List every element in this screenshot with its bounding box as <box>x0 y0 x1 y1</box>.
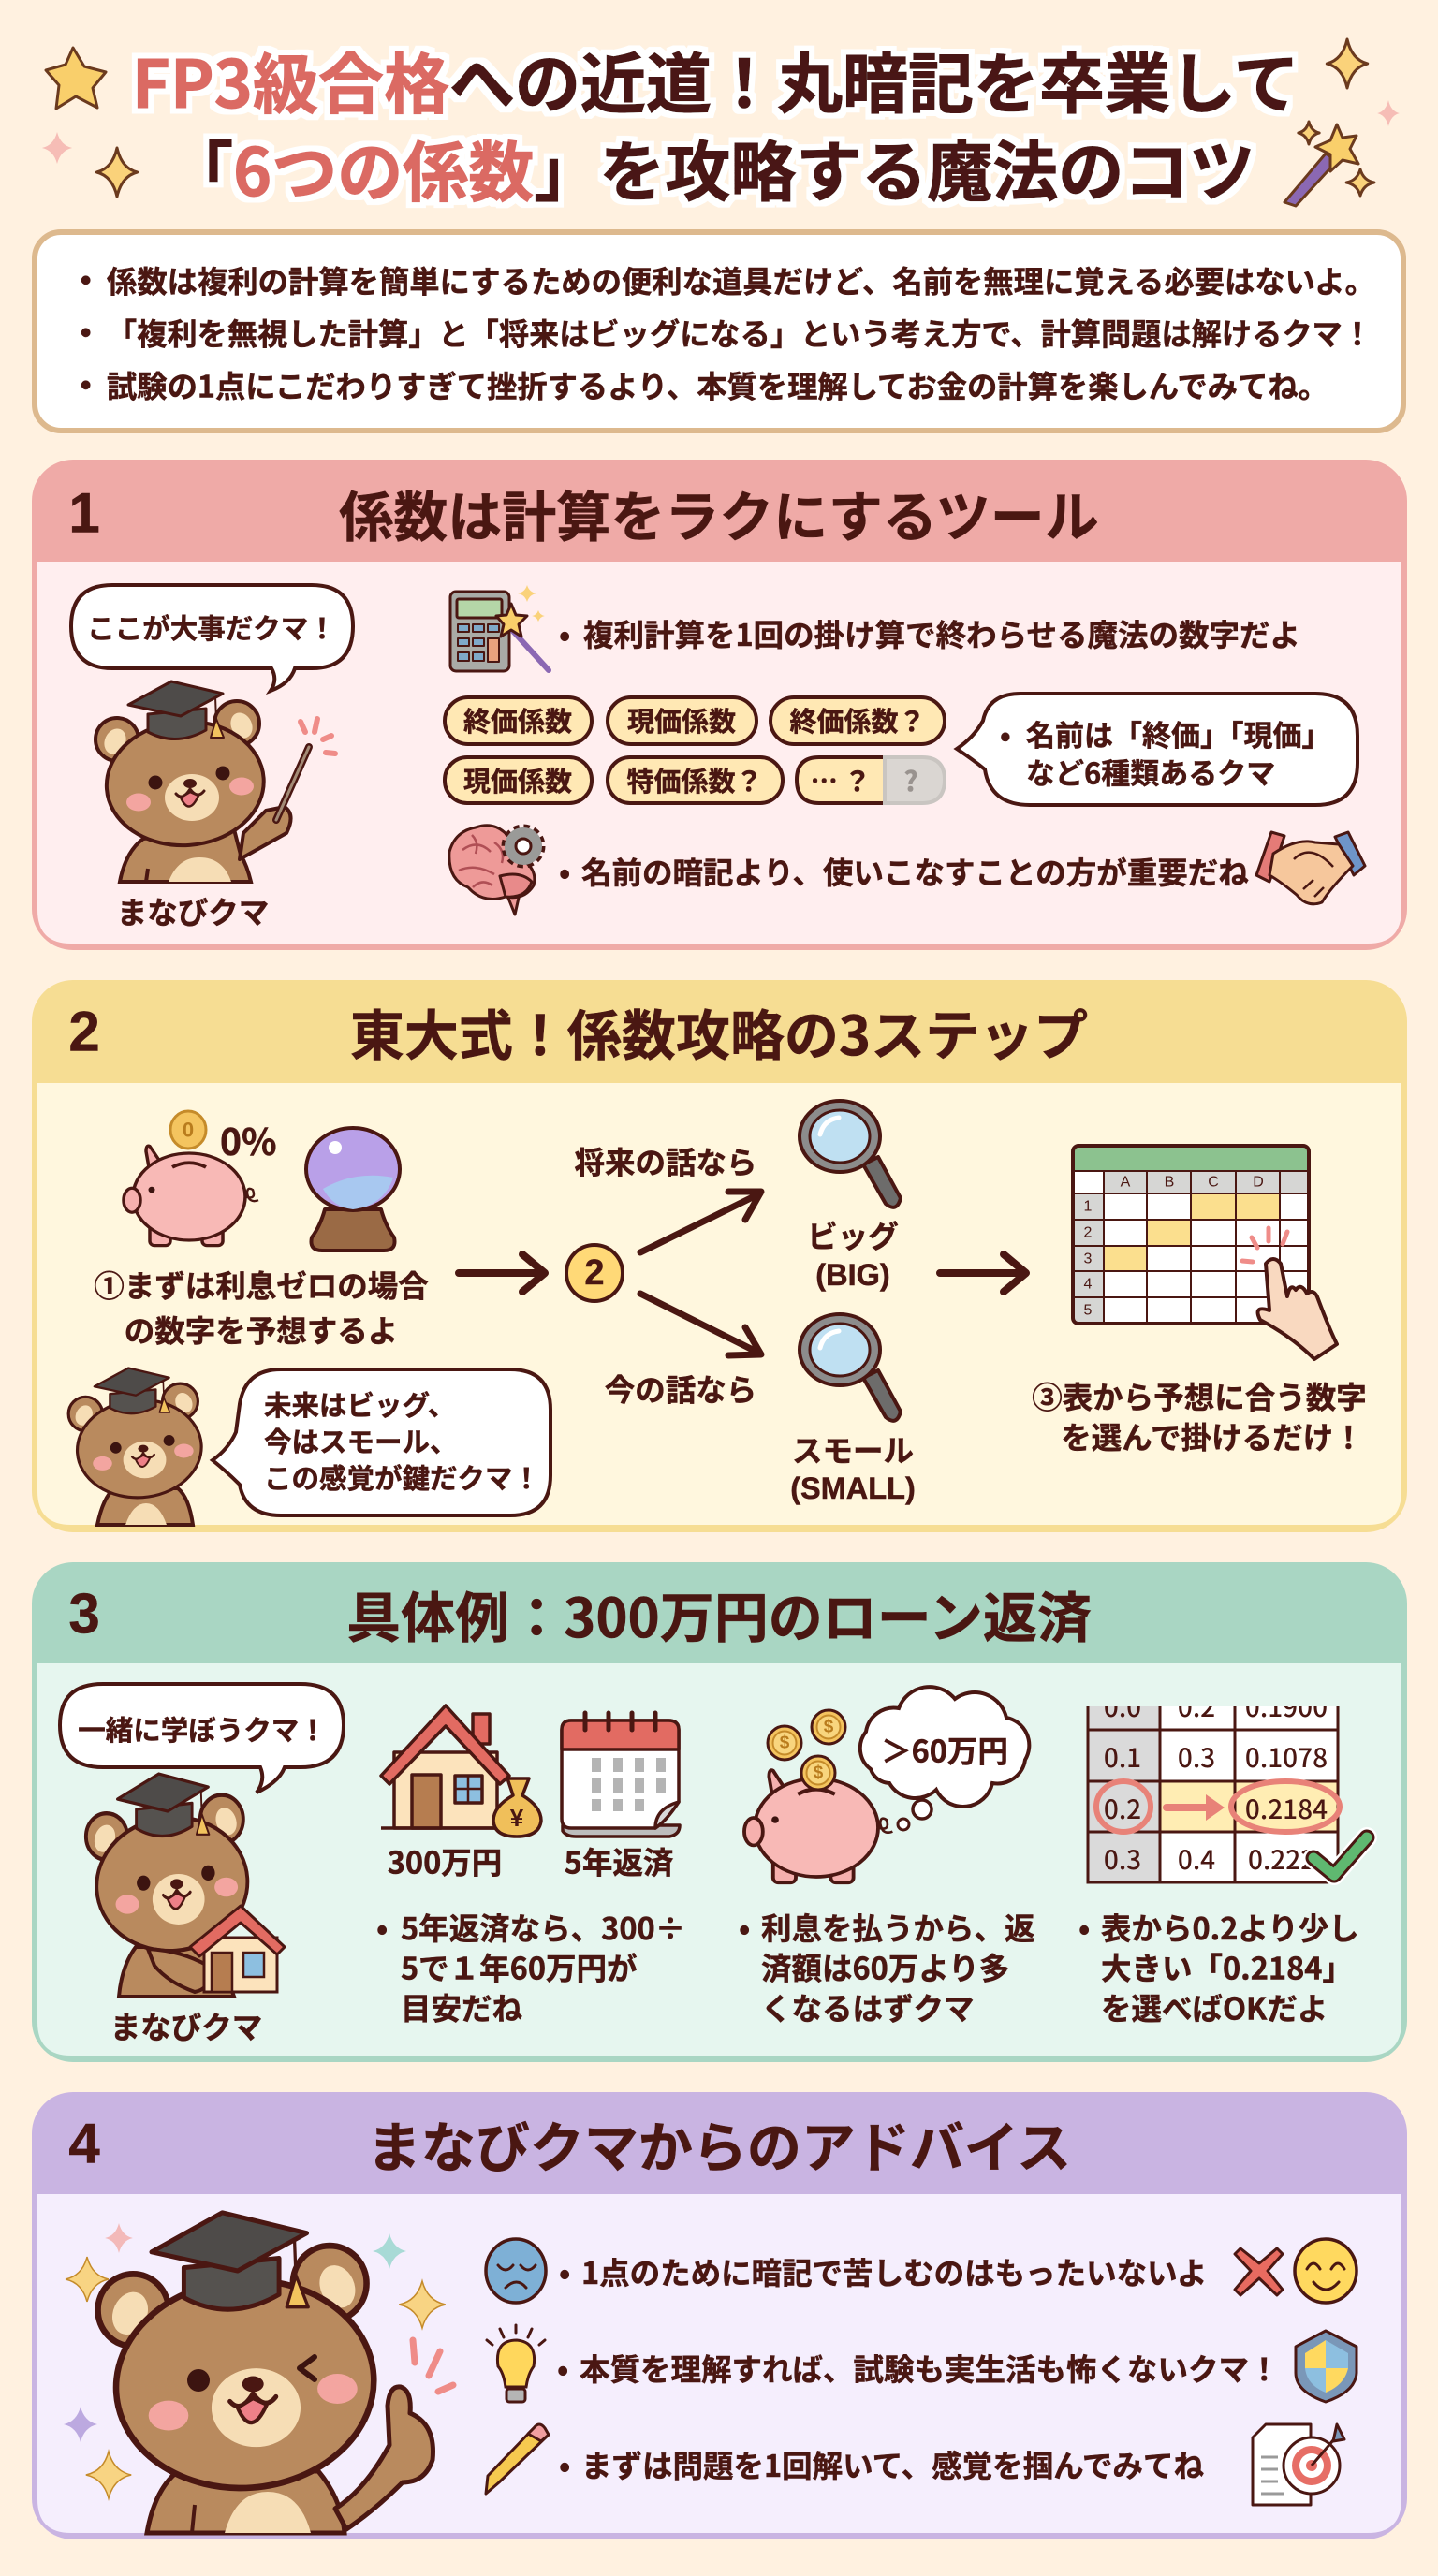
spreadsheet table: 4 <box>1084 1277 1093 1292</box>
label: 5 year repayment: 5年返済 <box>565 1838 673 1883</box>
arrow: to big <box>640 1192 761 1252</box>
section 2 heading: 東大式！係数攻略の3ステップ <box>350 992 1088 1071</box>
label: small <box>790 1427 916 1505</box>
advice 2: 本質を理解すれば、試験も実生活も怖くないクマ！ <box>580 2346 1280 2389</box>
bullet: magic number: 複利計算を1回の掛け算で終わらせる魔法の数字だよ <box>583 610 1300 655</box>
pill <box>770 697 945 744</box>
step 1 text: ①まずは利息ゼロの場合 <box>94 1262 429 1307</box>
coefficient table <box>1077 1676 1367 1882</box>
pill: 現価係数 <box>463 760 572 799</box>
section 2 number: 2 <box>68 1000 100 1063</box>
section 3 heading: 具体例：300万円のローン返済 <box>346 1574 1092 1653</box>
step 2 badge: 2 <box>584 1253 605 1293</box>
pill: fading <box>797 757 945 803</box>
pill: 特価係数？ <box>626 760 763 799</box>
bullet text: column 3: • <box>1078 1904 1090 1949</box>
coefficient table: 0.3 <box>1178 1738 1215 1776</box>
bullet: usage over names: 名前の暗記より、使いこなすことの方が重要だね <box>581 848 1249 893</box>
speech bubble: six types: など6種類あるクマ <box>1026 751 1275 792</box>
summary text: 「複利を無視した計算」と「将来はビッグになる」という考え方で、計算問題は解けるクマ！ <box>107 311 1372 354</box>
icon: house and money bag: ¥ <box>510 1804 524 1832</box>
section 4 heading: まなびクマからのアドバイス <box>367 2104 1071 2183</box>
panel: summary <box>35 232 1403 431</box>
bullet text: column 2: 利息を払うから、返 <box>761 1904 1035 1949</box>
bullet: magic number: • <box>559 610 570 655</box>
section 3 frame <box>32 1562 1407 2062</box>
sparkles around bear <box>64 2223 446 2498</box>
spreadsheet table: D <box>1253 1174 1264 1191</box>
summary text: 係数は複利の計算を簡単にするための便利な道具だけど、名前を無理に覚える必要はないよ。 <box>107 258 1375 301</box>
pill <box>445 697 592 744</box>
icon: magic wand <box>1284 122 1374 206</box>
step 3 text: ③表から予想に合う数字 <box>1032 1374 1367 1417</box>
icon: piggy bank with coin <box>124 1111 277 1246</box>
coefficient table: 0.1078 <box>1245 1738 1328 1776</box>
coefficient table: 0.222 <box>1248 1840 1315 1878</box>
icon: brain and gear <box>449 826 542 915</box>
icon: title stars and sparkles <box>42 39 1400 197</box>
label: present: 今の話なら <box>605 1367 756 1410</box>
icon: smiling face <box>1295 2239 1357 2303</box>
panel: section 1 <box>32 460 1407 950</box>
arrow <box>459 1254 545 1292</box>
section 4 frame <box>32 2092 1407 2539</box>
coefficient table: 0.2 <box>1178 1688 1215 1725</box>
speech bubble: learn together: 一緒に学ぼうクマ！ <box>78 1709 327 1749</box>
label: big: (BIG) <box>815 1258 890 1292</box>
icon: calculator and wand <box>450 585 549 671</box>
icon: light bulb <box>487 2325 545 2402</box>
coefficient table: 0.1 <box>1104 1738 1141 1776</box>
bullet text: column 1: 5年返済なら、300÷ <box>401 1904 685 1949</box>
speech bubble: future big: この感覚が鍵だクマ！ <box>264 1457 540 1497</box>
icon: pointing hand <box>1242 1228 1337 1359</box>
icon: handshake <box>1256 832 1365 904</box>
summary text: • <box>81 315 91 349</box>
icon: red cross <box>1235 2248 1283 2295</box>
section 3 number: 3 <box>68 1582 100 1646</box>
bullet text: column 3: を選べばOKだよ <box>1101 1984 1328 2029</box>
bear name: まなびクマ <box>117 889 269 932</box>
label: small: スモール <box>792 1427 914 1471</box>
bullet text: column 3: 大きい「0.2184」 <box>1101 1945 1353 1988</box>
icon: shield <box>1296 2331 1357 2402</box>
bullet text: column 3: 表から0.2より少し <box>1101 1904 1359 1949</box>
panel: section 3 <box>32 1562 1407 2062</box>
panel: section 2 <box>32 980 1407 1532</box>
bullet text: column 2: 済額は60万より多 <box>761 1945 1009 1988</box>
label: big: ビッグ <box>807 1213 899 1256</box>
section 2 frame <box>32 980 1407 1532</box>
step 3 text <box>1032 1374 1367 1458</box>
label: big <box>807 1213 899 1292</box>
spreadsheet table: B <box>1165 1174 1174 1191</box>
speech bubble: six types: • <box>1000 711 1011 754</box>
coefficient table: 0.1900 <box>1245 1688 1328 1725</box>
icon: sad face <box>486 2239 546 2303</box>
title <box>132 32 1299 215</box>
spreadsheet table <box>1073 1146 1309 1324</box>
spreadsheet table: A <box>1121 1174 1131 1191</box>
advice 1: • <box>559 2248 570 2293</box>
pill <box>608 757 783 803</box>
speech bubble: here is important: ここが大事だクマ！ <box>87 607 336 647</box>
section 2 body <box>37 1083 1401 1525</box>
bullet: usage over names: • <box>559 848 570 893</box>
pill: 終価係数 <box>463 700 572 739</box>
icon: document and target <box>1253 2424 1344 2505</box>
pill <box>608 697 756 744</box>
summary text: • <box>81 368 91 402</box>
coefficient table: 0.2184 <box>1245 1790 1328 1827</box>
section 1 number: 1 <box>68 481 100 545</box>
coefficient table: 0.0 <box>1104 1688 1141 1725</box>
bullet text: column 1: 5で１年60万円が <box>401 1945 638 1988</box>
step 3 text: を選んで掛けるだけ！ <box>1061 1413 1364 1458</box>
section 1 body <box>37 562 1401 944</box>
bullet text: column 1: 目安だね <box>401 1984 523 2029</box>
small bear <box>68 1368 205 1525</box>
icon: piggy bank with coin: 0 <box>183 1118 194 1142</box>
spreadsheet table: 5 <box>1084 1303 1093 1318</box>
section 3 body <box>37 1663 1401 2056</box>
bullet text: column 3 <box>1078 1904 1359 2029</box>
coefficient table: 0.4 <box>1178 1840 1215 1878</box>
thought bubble: ＞60万円 <box>881 1728 1008 1771</box>
bear with pointer <box>95 681 335 882</box>
advice 3: • <box>559 2441 570 2486</box>
icon: house and money bag <box>381 1705 541 1837</box>
speech bubble: here is important <box>71 585 353 691</box>
advice 1: 1点のために暗記で苦しむのはもったいないよ <box>581 2248 1208 2293</box>
bullet text: column 2: くなるはずクマ <box>761 1984 975 2029</box>
icon: crystal ball <box>306 1128 400 1251</box>
advice 3: まずは問題を1回解いて、感覚を掴んでみてね <box>581 2441 1204 2486</box>
summary text <box>81 258 1375 406</box>
arrow: to small <box>640 1294 761 1355</box>
speech bubble: six types: 名前は「終価」「現価」 <box>1026 711 1331 754</box>
speech bubble: future big <box>213 1369 550 1515</box>
step 2 badge <box>566 1245 623 1301</box>
icon: calendar <box>562 1713 680 1837</box>
icon: magnifier small <box>800 1314 901 1421</box>
speech bubble: future big: 今はスモール、 <box>264 1421 458 1460</box>
pill <box>445 757 592 803</box>
speech bubble: future big: 未来はビッグ、 <box>264 1384 455 1424</box>
speech bubble: learn together <box>60 1684 344 1793</box>
title: FP3級合格への近道！丸暗記を卒業して <box>132 32 1299 127</box>
pill: 現価係数 <box>627 700 736 739</box>
spreadsheet table: 3 <box>1084 1251 1093 1267</box>
bullet text: column 2 <box>739 1904 1035 2029</box>
spreadsheet table: 1 <box>1084 1198 1093 1215</box>
summary text: 試験の1点にこだわりすぎて挫折するより、本質を理解してお金の計算を楽しんでみてね。 <box>107 363 1328 406</box>
icon: magnifier big <box>800 1101 901 1208</box>
label: small: (SMALL) <box>790 1471 916 1505</box>
bear name: まなびクマ <box>110 2003 262 2048</box>
big bear with thumbs up <box>98 2213 453 2533</box>
bear with house <box>86 1774 285 1997</box>
summary text: • <box>81 263 91 297</box>
icon: piggy bank with coin: 0% <box>220 1114 277 1166</box>
icon: piggy bank with coins and thought <box>744 1687 1029 1882</box>
coefficient table: 0.3 <box>1104 1840 1141 1878</box>
spreadsheet table: 2 <box>1084 1224 1093 1241</box>
pill: 終価係数？ <box>789 700 926 739</box>
section 1 frame <box>32 460 1407 950</box>
step 1 text: の数字を予想するよ <box>125 1307 398 1352</box>
section 1 heading: 係数は計算をラクにするツール <box>339 474 1099 552</box>
label: 3 million yen: 300万円 <box>388 1838 502 1883</box>
spreadsheet table: C <box>1208 1174 1219 1191</box>
bullet text: column 1: • <box>376 1904 388 1949</box>
icon: pencil <box>486 2424 549 2494</box>
pill: fading: … ？ <box>811 760 871 799</box>
name pills <box>445 697 945 803</box>
thought bubble <box>860 1687 1029 1830</box>
coefficient table: 0.2 <box>1104 1790 1141 1827</box>
label: future: 将来の話なら <box>574 1138 757 1183</box>
pill: fading: ? <box>904 760 917 799</box>
bullet text: column 1 <box>376 1904 685 2029</box>
title: 「6つの係数」を攻略する魔法のコツ <box>168 120 1255 215</box>
section 4 number: 4 <box>68 2112 100 2175</box>
arrow <box>940 1254 1026 1292</box>
speech bubble: six types <box>957 694 1357 805</box>
panel: section 4 <box>32 2092 1407 2539</box>
section 4 body <box>37 2194 1401 2533</box>
step 1 text <box>94 1262 429 1352</box>
bullet text: column 2: • <box>739 1904 750 1949</box>
advice 2: • <box>557 2346 568 2389</box>
